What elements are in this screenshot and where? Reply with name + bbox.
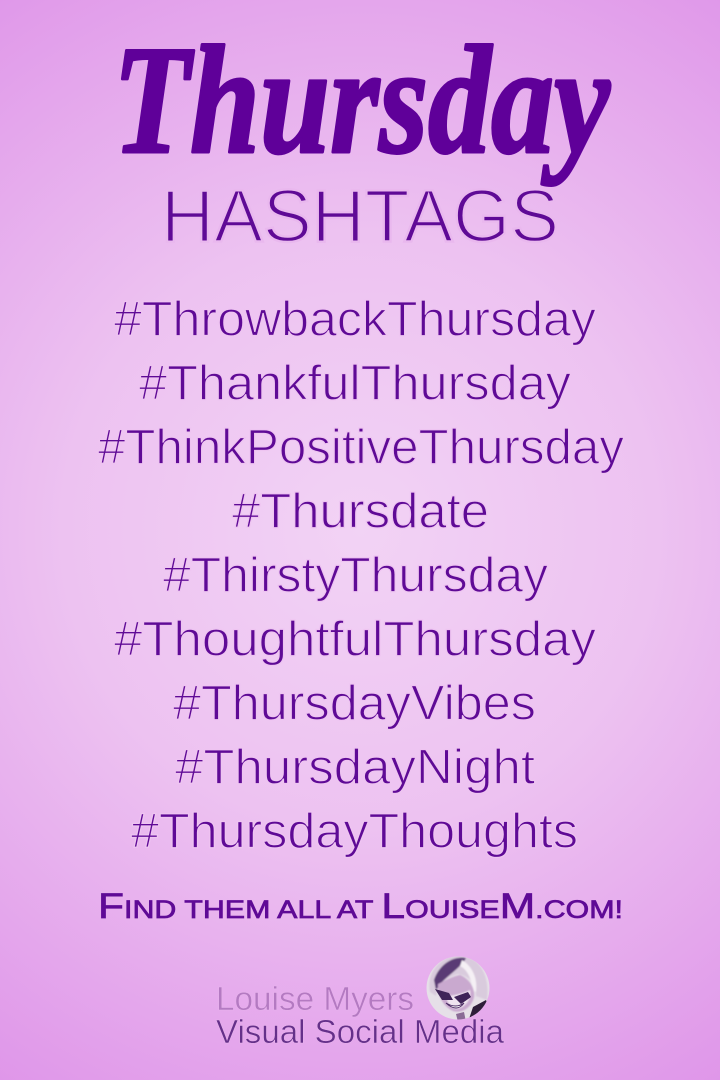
hashtag 2: #ThankfulThursday (139, 356, 572, 410)
brand tagline: Visual Social Media (216, 1013, 505, 1050)
hashtag list (98, 292, 624, 858)
hashtag 4: #Thursdate (232, 484, 489, 538)
hashtag 8: #ThursdayNight (175, 740, 535, 794)
hashtag 1: #ThrowbackThursday (114, 292, 597, 346)
brand name: Louise Myers (216, 980, 414, 1017)
smile (446, 1003, 464, 1008)
call to action: FIND THEM ALL AT LOUISE M .COM! (98, 887, 623, 926)
hashtag 6: #ThoughtfulThursday (114, 612, 597, 666)
hashtag 3: #ThinkPositiveThursday (98, 420, 624, 474)
face (438, 975, 474, 1012)
title: Thursday (113, 14, 611, 186)
hashtag 7: #ThursdayVibes (173, 676, 536, 730)
hashtag 9: #ThursdayThoughts (131, 804, 578, 858)
clothing (470, 1000, 486, 1018)
footer logo text (216, 980, 505, 1050)
hashtag 5: #ThirstyThursday (163, 548, 548, 602)
glasses (435, 989, 471, 1004)
subtitle: HASHTAGS (161, 174, 559, 258)
icon: portrait avatar (426, 956, 490, 1020)
hair (429, 956, 488, 1000)
